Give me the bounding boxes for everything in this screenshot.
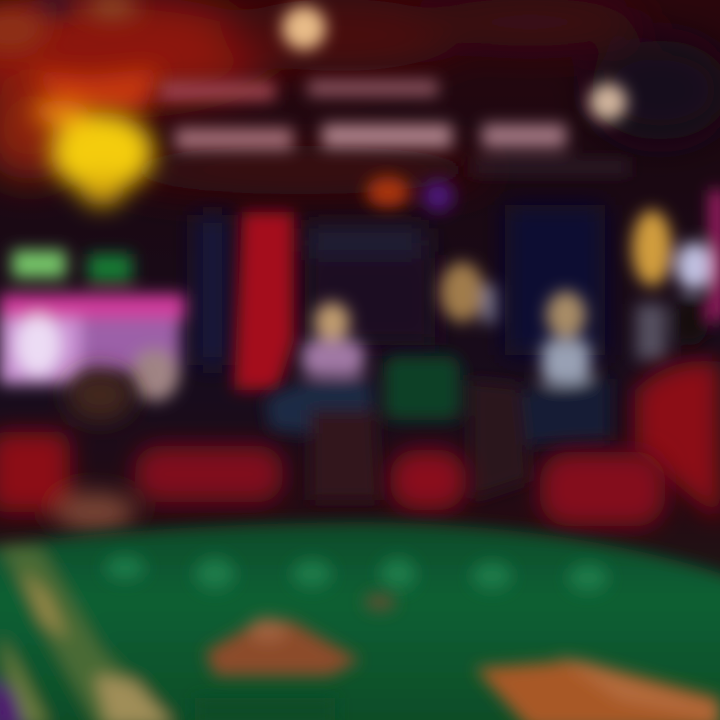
colored lights under title xyxy=(366,176,454,212)
ceiling glow xyxy=(0,0,720,194)
icon: ceiling lights xyxy=(282,6,627,121)
chips xyxy=(205,593,396,676)
seated people xyxy=(265,262,610,500)
slot machines xyxy=(0,250,185,401)
right side lights xyxy=(632,190,720,360)
red figure on right xyxy=(635,361,720,520)
table betting marks xyxy=(105,556,608,592)
red curtain xyxy=(234,212,294,390)
icon: yellow glow xyxy=(32,100,154,206)
red chairs xyxy=(0,369,665,532)
back wall panels xyxy=(195,205,605,365)
title band xyxy=(160,80,630,172)
hand and cards xyxy=(195,655,720,720)
explosion xyxy=(0,0,160,110)
green table xyxy=(0,522,720,720)
